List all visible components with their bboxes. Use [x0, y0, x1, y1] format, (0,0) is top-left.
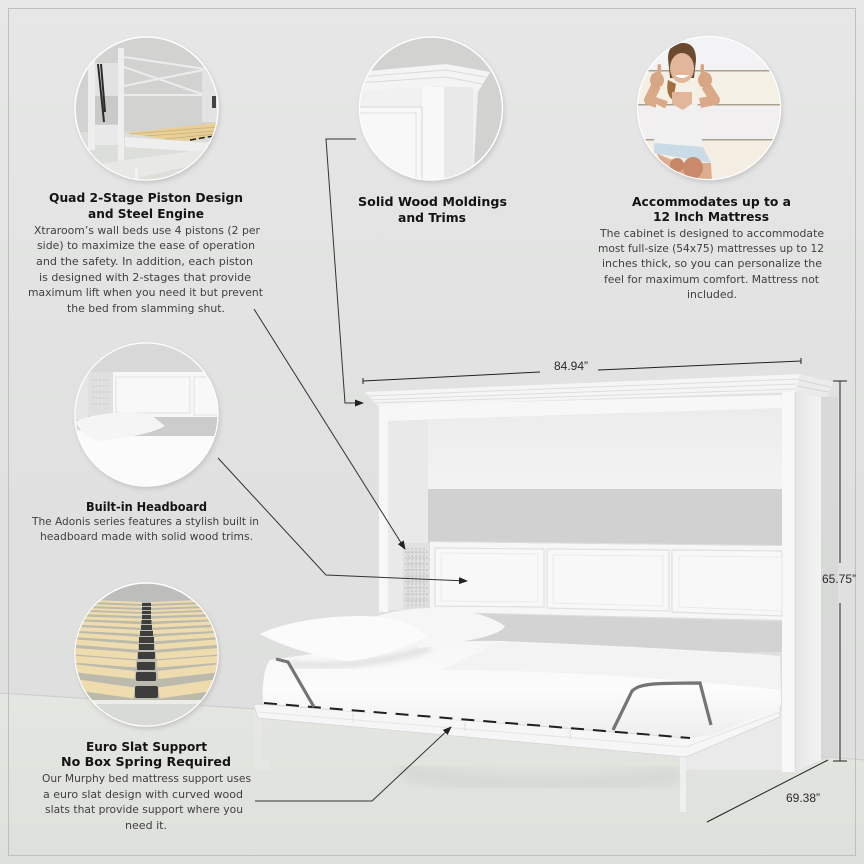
dimension: depth: [707, 760, 828, 822]
mattress: [263, 641, 781, 738]
dimension: height: 65.75”: [822, 572, 856, 586]
body: headboard: headboard made with solid wood trims.: [40, 530, 253, 543]
body: euro slats: Our Murphy bed mattress support uses: [42, 772, 251, 785]
text block: piston design: [28, 190, 264, 315]
body: piston design: is designed with 2-stages that provide: [39, 271, 251, 284]
callout arrow: slats: [255, 727, 451, 801]
body: piston design: the bed from slamming shut.: [67, 302, 225, 315]
circle: moldings: [358, 37, 504, 183]
text block: headboard: [31, 499, 259, 543]
callout arrow: headboard: [218, 458, 467, 581]
heading: headboard: Built-in Headboard: [86, 499, 207, 514]
pillows: [260, 608, 505, 661]
heading: moldings: Solid Wood Moldings: [358, 194, 507, 209]
body: mattress: most full-size (54x75) mattresses up to 12: [598, 242, 824, 255]
dimension: width: 84.94”: [554, 359, 588, 373]
body: mattress: The cabinet is designed to accommodate: [599, 227, 824, 240]
body: euro slats: need it.: [125, 819, 167, 832]
heading: euro slats: No Box Spring Required: [61, 754, 231, 769]
callout arrow: moldings: [326, 139, 363, 403]
bed frame and legs: [254, 704, 782, 812]
heading: moldings: and Trims: [398, 210, 466, 225]
body: euro slats: a euro slat design with curved wood: [43, 788, 243, 801]
wall bed illustration: [254, 374, 838, 812]
body: headboard: The Adonis series features a stylish built in: [31, 515, 259, 528]
heading: piston design: [49, 190, 243, 221]
heading: moldings: [358, 194, 507, 225]
body: mattress: feel for maximum comfort. Mattress not: [604, 273, 820, 286]
body: piston design: maximum lift when you need it but prevent: [28, 286, 264, 299]
dimension: width: [363, 358, 801, 384]
heading: mattress: Accommodates up to a: [632, 194, 791, 209]
heading: euro slats: Euro Slat Support: [86, 739, 207, 754]
circle: piston design: [75, 37, 220, 183]
text block: euro slats: [42, 739, 251, 832]
body: euro slats: [42, 772, 251, 832]
circle: built-in headboard: [75, 343, 220, 489]
circle: euro slats: [72, 583, 222, 729]
headboard with panels: [403, 542, 782, 621]
heading: piston design: Quad 2-Stage Piston Design: [49, 190, 243, 205]
bed cabinet interior: [379, 405, 782, 652]
bed cabinet right pillar: [782, 392, 838, 772]
dimension: height: [822, 381, 856, 761]
body: piston design: [28, 224, 264, 315]
body: piston design: and the safety. In addition, each piston: [36, 255, 253, 268]
body: headboard: [31, 515, 259, 543]
dimension: depth: 69.38”: [786, 791, 820, 805]
body: piston design: side) to maximize the ease of operation: [37, 239, 255, 252]
heading: piston design: and Steel Engine: [88, 206, 204, 221]
mattress straps: [276, 659, 711, 730]
crown molding: [365, 374, 833, 421]
body: mattress: included.: [687, 288, 737, 301]
body: piston design: Xtraroom’s wall beds use 4 pistons (2 per: [34, 224, 260, 237]
callout arrow: pistons: [254, 309, 405, 549]
text block: mattress: [598, 194, 824, 301]
heading: mattress: 12 Inch Mattress: [653, 209, 769, 224]
body: mattress: [598, 227, 824, 301]
heading: mattress: [632, 194, 791, 224]
body: euro slats: slats that provide support where you: [45, 803, 243, 816]
body: mattress: inches thick, so you can personalize the: [602, 257, 822, 270]
circle: mattress woman photo: [637, 36, 782, 182]
heading: euro slats: [61, 739, 231, 769]
